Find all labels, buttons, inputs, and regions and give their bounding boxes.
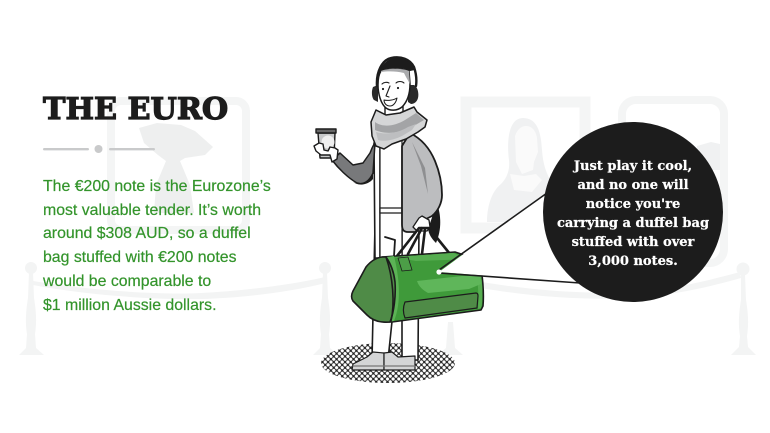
body text: bag stuffed with €200 notes [43,249,236,266]
title: THE EURO [43,92,228,127]
picture frame: right [622,100,724,263]
jacket left strip [374,140,380,258]
body text: would be comparable to [43,273,211,290]
shoes [352,352,415,370]
body text [42,178,271,314]
callout circle [543,122,723,302]
rope barrier: left [19,262,338,355]
jacket [402,133,442,232]
duffel bag [352,252,483,322]
coffee cup [314,129,338,162]
belt [380,208,402,213]
callout text: carrying a duffel bag [557,216,709,231]
bag handles [385,228,450,256]
jacket sleeve shadow [412,142,428,194]
callout text: stuffed with over [572,235,694,250]
body text: The €200 note is the Eurozone’s [43,178,271,195]
callout text [557,159,709,269]
shirt [380,138,402,258]
legs [372,225,419,360]
arm holding cup [332,143,375,184]
callout pointer [436,193,580,283]
strap tail [428,203,440,243]
neck and head [372,57,418,122]
body text: $1 million Aussie dollars. [43,297,216,314]
arm shadow [353,174,373,185]
rope barrier: right [438,262,756,355]
body text: around $308 AUD, so a duffel [43,225,251,242]
callout text: and no one will [577,178,689,193]
callout text: Just play it cool, [574,159,692,174]
scarf [371,107,427,149]
heading divider [43,145,155,153]
callout text: notice you're [586,197,680,212]
callout text: 3,000 notes. [588,254,678,269]
hand on handles [413,216,430,231]
picture frame: left [111,101,246,230]
picture frame: Mona Lisa [466,102,585,228]
halftone ground shadow [321,343,455,383]
body text: most valuable tender. It’s worth [43,202,261,219]
